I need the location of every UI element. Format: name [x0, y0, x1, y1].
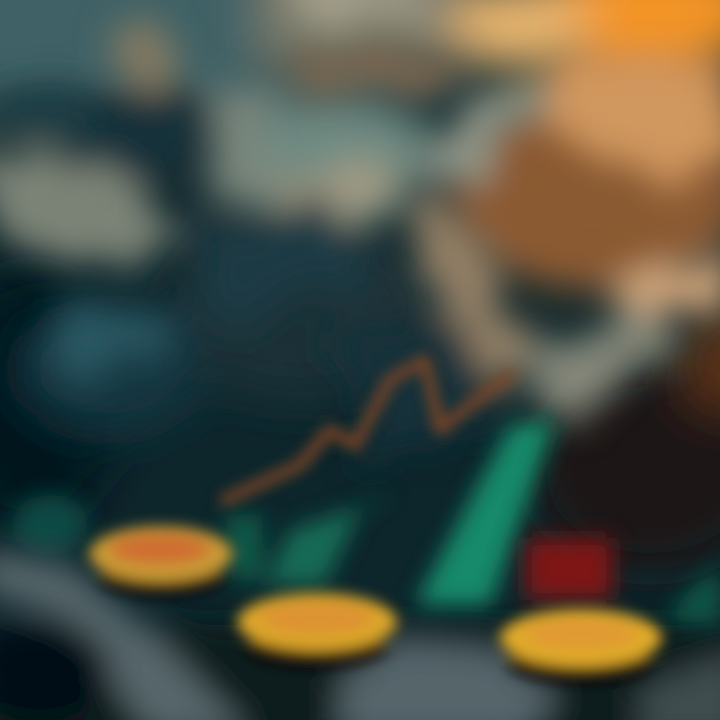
coin: right	[500, 609, 662, 682]
green candlestick bars	[225, 420, 720, 625]
coin: centre	[237, 593, 397, 666]
sky: storm clouds and sunset glow	[0, 0, 720, 570]
orange trend line	[225, 360, 510, 500]
cloud details	[0, 0, 720, 450]
foreground rocks	[0, 548, 720, 720]
red candlestick	[525, 538, 613, 600]
coin: left	[89, 526, 233, 596]
dark teal glow at lower left	[12, 495, 88, 555]
